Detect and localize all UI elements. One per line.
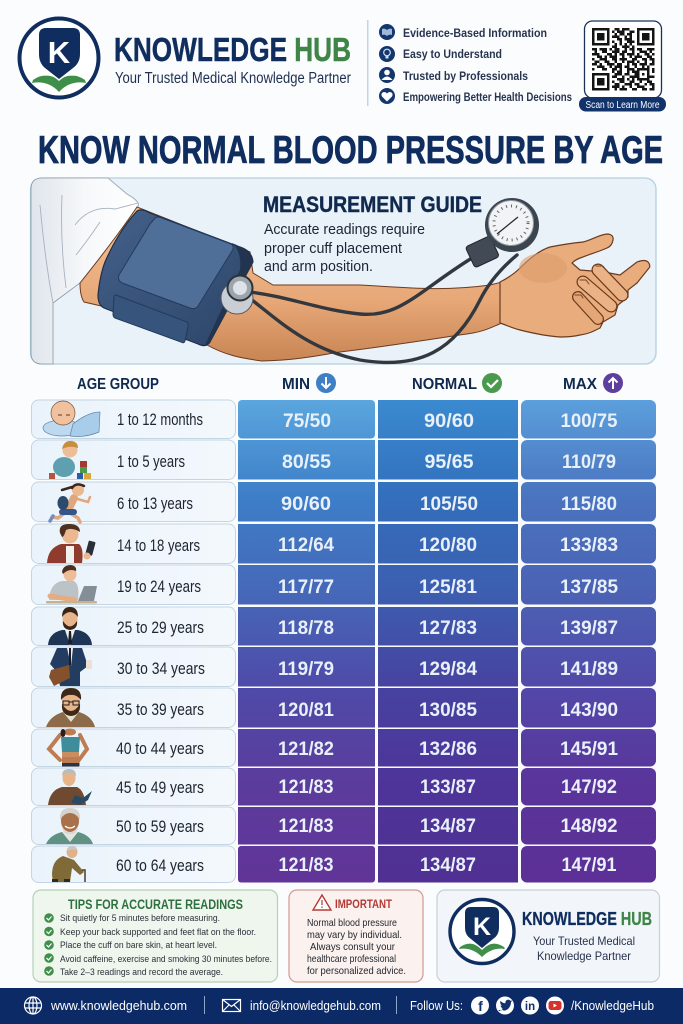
row: 40 to 44 years: 121/82 [278, 738, 334, 760]
table header [77, 373, 623, 393]
tips list [60, 913, 272, 978]
row: 14 to 18 years: 133/83 [560, 534, 618, 556]
row: 19 to 24 years: 125/81 [419, 576, 477, 598]
icon: facebook [471, 996, 489, 1014]
row: 1 to 12 months [32, 400, 656, 438]
icon: older man reading [48, 769, 92, 805]
tips list: Take 2–3 readings and record the average. [60, 967, 223, 978]
row: 19 to 24 years [32, 565, 656, 604]
row: 60 to 64 years [32, 846, 656, 882]
panel: important [289, 890, 423, 982]
important text: healthcare professional [307, 953, 396, 965]
column: min [282, 373, 336, 393]
row: 45 to 49 years: 121/83 [278, 776, 334, 798]
row: 14 to 18 years [32, 524, 656, 564]
row: 6 to 13 years: 90/60 [281, 493, 331, 515]
tips list: Sit quietly for 5 minutes before measuring. [60, 913, 220, 924]
header logo [20, 18, 98, 98]
feature: evidence: Evidence-Based Information [403, 26, 547, 40]
row: 45 to 49 years: 45 to 49 years [116, 778, 204, 797]
column: max [563, 373, 623, 393]
icon: linkedin: in [525, 1001, 535, 1013]
panel: footer logo [437, 890, 660, 982]
row: 1 to 5 years: 80/55 [282, 451, 331, 473]
email: info@knowledgehub.com [250, 998, 381, 1013]
row: 40 to 44 years [32, 728, 656, 766]
row: 19 to 24 years: 117/77 [278, 576, 334, 598]
important text: for personalized advice. [307, 965, 406, 977]
row: 14 to 18 years: 120/80 [419, 534, 477, 556]
row: 45 to 49 years [32, 768, 656, 806]
row: 60 to 64 years: 60 to 64 years [116, 856, 204, 875]
important heading: IMPORTANT [335, 899, 392, 911]
QR code [579, 21, 666, 112]
tips list: Place the cuff on bare skin, at heart level. [60, 940, 217, 951]
row: 1 to 12 months: 100/75 [560, 410, 618, 432]
icon: commuter with bag and cup [49, 648, 92, 686]
icon: fit woman [49, 728, 87, 766]
icon: warning triangle [313, 895, 331, 910]
guide text: Accurate readings require [264, 221, 425, 238]
row: 1 to 5 years: 95/65 [424, 451, 474, 473]
row: 45 to 49 years: 133/87 [420, 776, 476, 798]
column: max: MAX [563, 376, 597, 393]
row: 45 to 49 years: 147/92 [561, 776, 617, 798]
icon: heart [379, 88, 395, 104]
row: 35 to 39 years: 130/85 [419, 699, 477, 721]
row: 30 to 34 years: 119/79 [278, 658, 334, 680]
row: 30 to 34 years [32, 647, 656, 686]
row: 25 to 29 years: 139/87 [560, 617, 618, 639]
row: 25 to 29 years: 127/83 [419, 617, 477, 639]
icon: twitter [496, 996, 514, 1014]
footer logo mark: K [473, 913, 491, 941]
row: 40 to 44 years: 132/86 [419, 738, 477, 760]
row: 1 to 12 months: 90/60 [424, 410, 474, 432]
row: 50 to 59 years: 134/87 [420, 815, 476, 837]
row: 50 to 59 years [32, 807, 656, 844]
row: 35 to 39 years: 143/90 [560, 699, 618, 721]
important text: Always consult your [310, 941, 395, 953]
illustration: arm [80, 207, 502, 361]
icon: baby [43, 401, 100, 436]
logo book [32, 76, 86, 92]
row: 50 to 59 years: 50 to 59 years [116, 817, 204, 836]
guide heading: MEASUREMENT GUIDE [263, 192, 482, 217]
icon: youtube [546, 996, 564, 1014]
scan badge: Scan to Learn More [586, 100, 660, 111]
icon: facebook: f [478, 998, 483, 1014]
icon: mail [222, 1000, 240, 1012]
illustration: gauge [465, 198, 539, 268]
feature: trusted: Trusted by Professionals [403, 69, 528, 83]
row: 6 to 13 years: 105/50 [420, 493, 478, 515]
social handle: /KnowledgeHub [571, 998, 654, 1013]
footer brand name: KNOWLEDGE HUB [522, 909, 652, 929]
footer logo mark [450, 900, 514, 964]
guide text [264, 221, 425, 275]
row: 40 to 44 years: 145/91 [560, 738, 618, 760]
website: www.knowledgehub.com [50, 998, 187, 1013]
icon: toddler with blocks [49, 441, 91, 479]
follow us: Follow Us: [410, 998, 463, 1013]
icon: young adult at laptop [46, 565, 97, 604]
row: 35 to 39 years: 120/81 [278, 699, 334, 721]
tip check icons [44, 913, 54, 976]
row: 30 to 34 years: 141/89 [560, 658, 618, 680]
row: 30 to 34 years: 129/84 [419, 658, 477, 680]
icon: person [379, 67, 395, 83]
tips list: Keep your back supported and feet flat on the floor. [60, 927, 256, 938]
row: 1 to 5 years: 110/79 [562, 451, 616, 473]
icon: globe [24, 997, 42, 1014]
important text [307, 917, 406, 977]
row: 19 to 24 years: 137/85 [560, 576, 618, 598]
footer tagline: Knowledge Partner [537, 949, 631, 963]
column: age group: AGE GROUP [77, 376, 159, 393]
panel: measurement guide [30, 178, 656, 364]
row: 1 to 12 months: 1 to 12 months [117, 410, 203, 429]
row: 6 to 13 years: 115/80 [561, 493, 617, 515]
row: 35 to 39 years: 35 to 39 years [117, 700, 204, 719]
important text: Normal blood pressure [307, 917, 397, 929]
guide text: and arm position. [264, 258, 373, 275]
row: 25 to 29 years: 25 to 29 years [117, 618, 204, 637]
illustration: fingers [575, 266, 622, 319]
feature: easy: Easy to Understand [403, 47, 502, 61]
row: 50 to 59 years: 121/83 [278, 815, 334, 837]
illustration: blood pressure cuff [98, 210, 253, 346]
icon: light bulb [379, 46, 395, 62]
row: 1 to 5 years [32, 440, 656, 480]
footer tagline: Your Trusted Medical [533, 934, 635, 948]
icon: man in suit [48, 607, 92, 645]
feature list [379, 24, 572, 104]
illustration: stethoscope head [221, 276, 253, 314]
row: 50 to 59 years: 148/92 [560, 815, 618, 837]
row: 40 to 44 years: 40 to 44 years [116, 739, 204, 758]
icon: linkedin [521, 996, 539, 1014]
row: 1 to 12 months: 75/50 [283, 410, 331, 432]
row: 6 to 13 years: 6 to 13 years [117, 494, 193, 513]
logo letter K: K [48, 35, 71, 70]
icon: bearded man with glasses [46, 688, 95, 727]
blood pressure table [32, 400, 656, 882]
row: 60 to 64 years: 134/87 [420, 854, 476, 876]
row: 14 to 18 years: 14 to 18 years [117, 536, 200, 555]
row: 60 to 64 years: 121/83 [278, 854, 334, 876]
row: 30 to 34 years: 30 to 34 years [117, 659, 205, 678]
column: normal [412, 373, 502, 393]
icon: elderly man with cane [52, 846, 85, 882]
row: 14 to 18 years: 112/64 [278, 534, 334, 556]
footer tagline [533, 934, 635, 963]
tips heading: TIPS FOR ACCURATE READINGS [68, 897, 243, 912]
illustration: shirt sleeve [31, 178, 138, 364]
row: 19 to 24 years: 19 to 24 years [117, 577, 201, 596]
tips list: Avoid caffeine, exercise and smoking 30 minutes before. [60, 954, 272, 965]
important text: may vary by individual. [307, 929, 402, 941]
panel: tips [33, 890, 278, 982]
illustration: stethoscope tubes [250, 255, 517, 362]
icon: senior man smiling [46, 808, 93, 844]
brand tagline: Your Trusted Medical Knowledge Partner [115, 70, 351, 87]
illustration: hand [500, 234, 650, 337]
icon: running child [50, 484, 90, 522]
column: min: MIN [282, 376, 310, 393]
row: 6 to 13 years [32, 482, 656, 522]
row: 35 to 39 years [32, 688, 656, 728]
row: 25 to 29 years [32, 607, 656, 646]
brand name: KNOWLEDGE HUB [114, 31, 351, 68]
column: normal: NORMAL [412, 376, 477, 393]
icon: teen with phone [47, 524, 96, 563]
footer bar [0, 988, 683, 1024]
row: 25 to 29 years: 118/78 [278, 617, 334, 639]
row: 60 to 64 years: 147/91 [562, 854, 617, 876]
guide text: proper cuff placement [264, 240, 403, 257]
icon: open book [379, 24, 395, 40]
feature: empowering: Empowering Better Health Decisions [403, 90, 572, 104]
row: 1 to 5 years: 1 to 5 years [117, 452, 185, 471]
